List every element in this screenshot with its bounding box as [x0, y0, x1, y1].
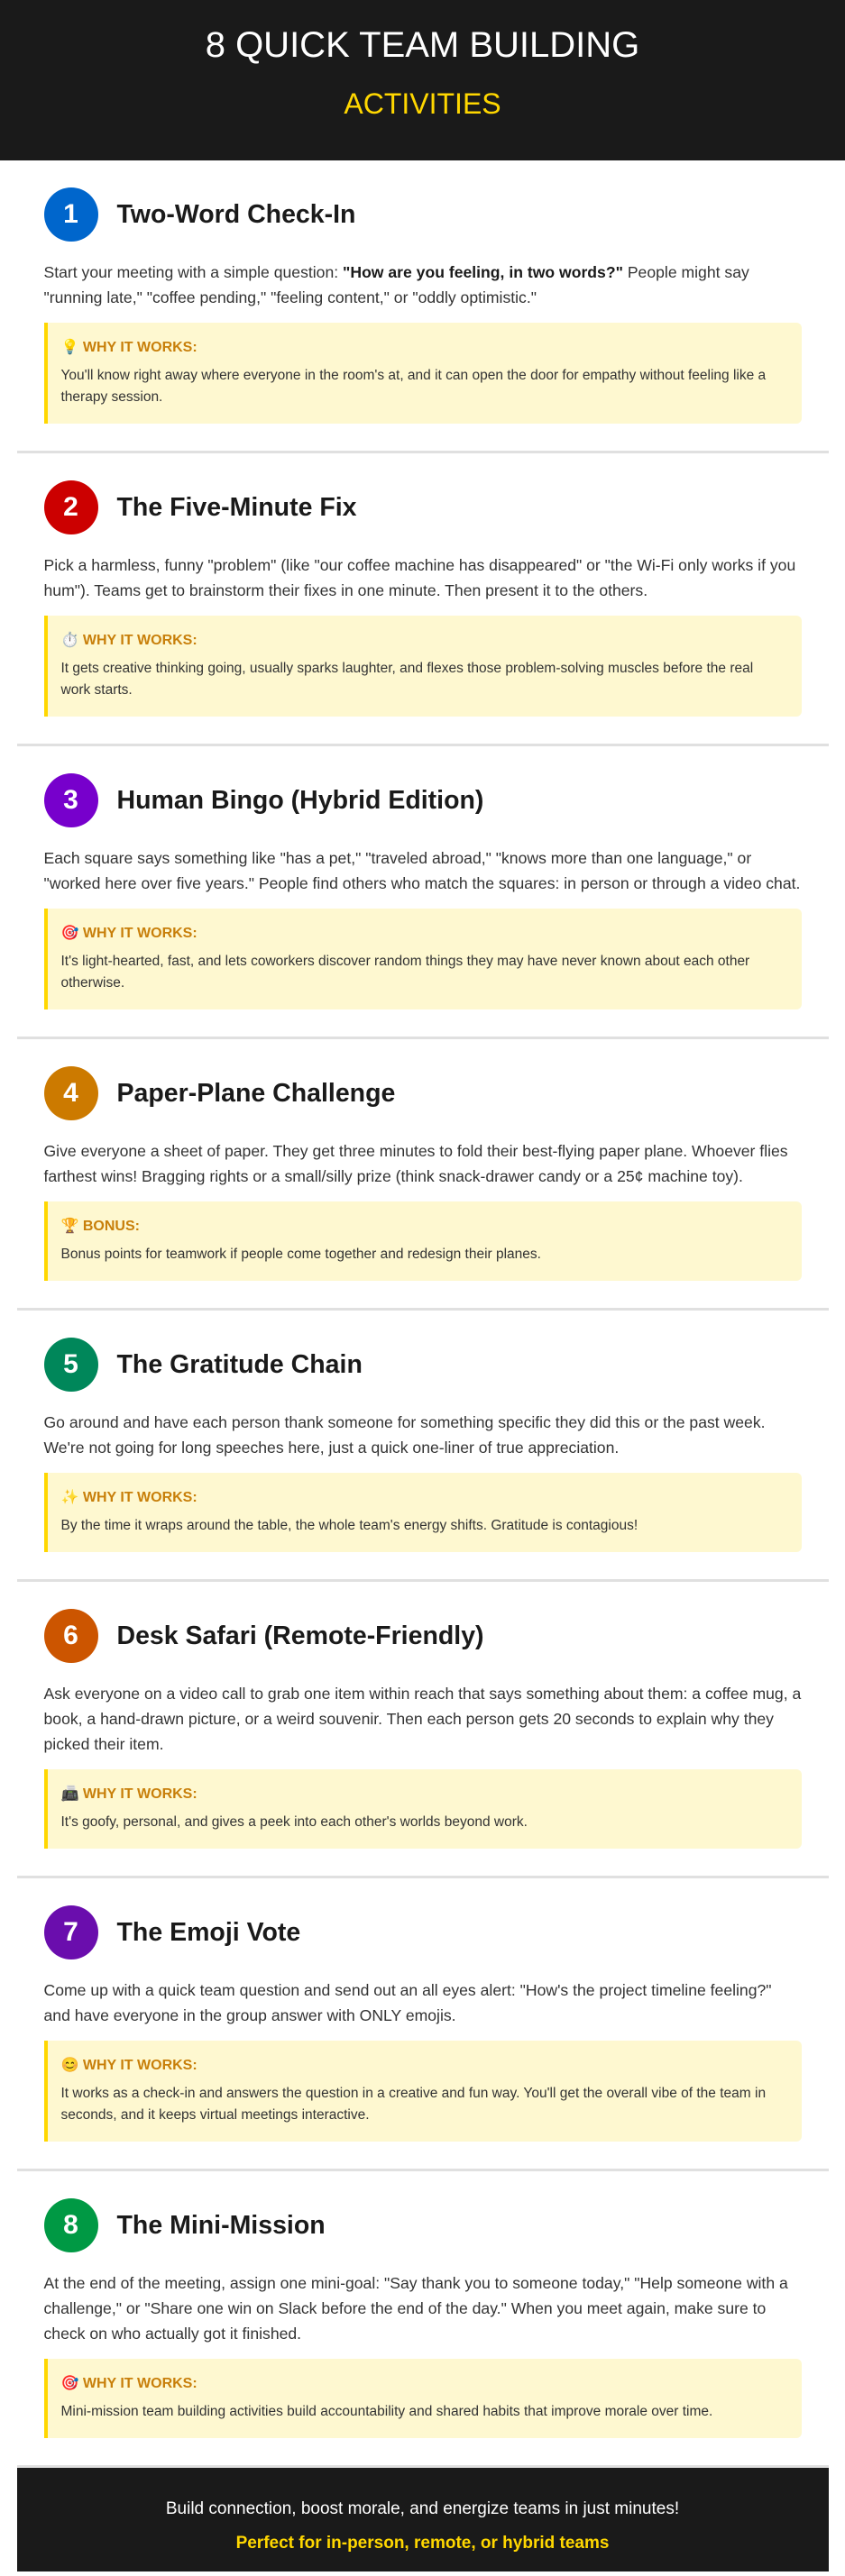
heading 6: 6	[63, 1621, 78, 1650]
callout: why it works 2	[43, 616, 801, 717]
header	[0, 0, 845, 160]
callout: why it works 3: It's light-hearted, fast, and lets coworkers discover random things they may have never known about each other otherwise.	[61, 954, 749, 991]
panel: activity 1	[16, 160, 828, 453]
heading 3: Human Bingo (Hybrid Edition)	[117, 786, 483, 815]
heading 5: The Gratitude Chain	[117, 1350, 363, 1379]
heading 7: 7	[63, 1917, 78, 1947]
panel: activity 6	[16, 1582, 828, 1878]
panel: activity 3	[16, 746, 828, 1039]
callout: why it works 6	[43, 1769, 801, 1849]
callout: bonus	[43, 1201, 801, 1281]
heading 8	[44, 2198, 326, 2252]
title: 8 QUICK TEAM BUILDING	[206, 25, 639, 65]
callout: why it works 8: 🎯 WHY IT WORKS:	[61, 2376, 197, 2391]
heading 6	[44, 1609, 484, 1663]
text: activity 5: Go around and have each person thank someone for something specific they did this or the past week. We're not going for long speeches here, just a quick one-liner of true appreciation.	[43, 1413, 766, 1457]
callout: why it works 8: Mini-mission team building activities build accountability and shared habits that improve morale over time.	[61, 2404, 712, 2419]
panel: activity 2	[16, 453, 828, 746]
panel: activity 4	[16, 1039, 828, 1311]
panel: activity 8	[16, 2171, 828, 2468]
heading 3: 3	[63, 785, 78, 815]
text: activity 7: Come up with a quick team question and send out an all eyes alert: "How's the project timeline feeling?" and have everyone in the group answer with ONLY emojis.	[43, 1981, 772, 2024]
heading 1: Two-Word Check-In	[117, 200, 355, 229]
callout: why it works 2: ⏱️ WHY IT WORKS:	[61, 633, 197, 648]
callout: why it works 1	[43, 323, 801, 424]
callout: why it works 3: 🎯 WHY IT WORKS:	[61, 926, 197, 941]
heading 1	[44, 187, 355, 242]
text: activity 8: At the end of the meeting, assign one mini-goal: "Say thank you to someone today," "Help someone with a challenge," or "Share one win on Slack before the end of the day." When you meet again, make sure to check on who actually got it finished.	[43, 2274, 788, 2343]
text: activity 4: Give everyone a sheet of paper. They get three minutes to fold their best-flying paper plane. Whoever flies farthest wins! Bragging rights or a small/silly prize (think snack-drawer candy or a 25¢ machine toy).	[43, 1142, 788, 1185]
heading 2: 2	[63, 492, 78, 522]
heading 2: The Five-Minute Fix	[117, 492, 357, 521]
heading 4: Paper-Plane Challenge	[117, 1078, 395, 1107]
callout: why it works 5: ✨ WHY IT WORKS:	[61, 1490, 197, 1505]
heading 8: 8	[63, 2210, 78, 2240]
callout: why it works 5: By the time it wraps around the table, the whole team's energy shifts. Gratitude is contagious!	[61, 1518, 638, 1533]
callout: why it works 7: It works as a check-in and answers the question in a creative and fun way. You'll get the overall vibe of the team in seconds, and it keeps virtual meetings interactive.	[61, 2086, 766, 2123]
callout: why it works 5	[43, 1473, 801, 1552]
callout: why it works 6: It's goofy, personal, and gives a peek into each other's worlds beyond work.	[61, 1814, 528, 1830]
callout: why it works 2: It gets creative thinking going, usually sparks laughter, and flexes those problem-solving muscles before the real work starts.	[61, 661, 753, 698]
panel: activity 7	[16, 1878, 828, 2171]
footer text: Build connection, boost morale, and energize teams in just minutes!	[166, 2499, 679, 2518]
text: activity 2: Pick a harmless, funny "problem" (like "our coffee machine has disappeared" or "the Wi-Fi only works if you hum"). Teams get to brainstorm their fixes in one minute. Then present it to the others.	[43, 556, 795, 599]
panel: activity 5	[16, 1311, 828, 1582]
callout: why it works 7	[43, 2041, 801, 2142]
subtitle: ACTIVITIES	[344, 87, 501, 120]
heading 6: Desk Safari (Remote-Friendly)	[117, 1621, 484, 1649]
heading 7: The Emoji Vote	[117, 1918, 300, 1947]
heading 4	[44, 1066, 395, 1120]
heading 3	[44, 773, 483, 827]
heading 5: 5	[63, 1349, 78, 1379]
text: activity 1: Start your meeting with a simple question: "How are you feeling, in two words?" People might say "running late," "coffee pending," "feeling content," or "oddly optimistic."	[43, 263, 749, 306]
callout: why it works 1: You'll know right away where everyone in the room's at, and it can open the door for empathy without feeling like a therapy session.	[61, 368, 766, 405]
footer tagline: Perfect for in-person, remote, or hybrid teams	[236, 2534, 609, 2553]
callout: bonus: Bonus points for teamwork if people come together and redesign their planes.	[61, 1247, 541, 1262]
callout: why it works 6: 📠 WHY IT WORKS:	[61, 1786, 197, 1802]
footer	[16, 2468, 828, 2571]
callout: bonus: 🏆 BONUS:	[61, 1219, 140, 1234]
heading 8: The Mini-Mission	[117, 2210, 326, 2239]
heading 7	[44, 1905, 300, 1959]
text: activity 6: Ask everyone on a video call to grab one item within reach that says something about them: a coffee mug, a book, a hand-drawn picture, or a weird souvenir. Then each person gets 20 seconds to explain why they picked their item.	[43, 1685, 801, 1753]
callout: why it works 7: 😊 WHY IT WORKS:	[61, 2058, 197, 2073]
heading 1: 1	[63, 199, 78, 229]
heading 4: 4	[63, 1078, 78, 1108]
callout: why it works 1: 💡 WHY IT WORKS:	[61, 340, 197, 355]
callout: why it works 3	[43, 909, 801, 1009]
text: activity 3: Each square says something like "has a pet," "traveled abroad," "knows more than one language," or "worked here over five years." People find others who match the squares: in person or through a video chat.	[43, 849, 800, 892]
heading 5	[44, 1338, 363, 1392]
callout: why it works 8	[43, 2359, 801, 2438]
heading 2	[44, 480, 357, 534]
